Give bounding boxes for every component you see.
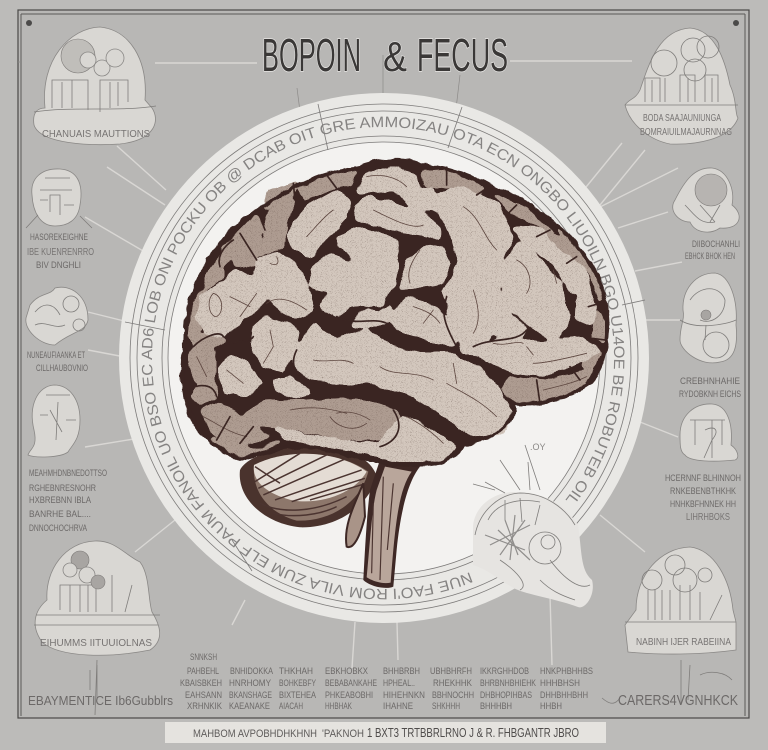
- panel: left item 4: HXBREBNN IBLA: [29, 495, 91, 505]
- panel: left item 4: BANRHE BAL....: [29, 509, 91, 519]
- column 8: DHHBHHBHH: [540, 690, 588, 700]
- column 3: [279, 666, 316, 711]
- column 4: BEBABANKAHE: [325, 678, 377, 688]
- column 3: BIXTEHEA: [279, 690, 316, 700]
- column 1: KBAISBKEH: [180, 678, 222, 688]
- column 5: [383, 666, 425, 711]
- panel: left item 2: HASOREKEIGHNE: [30, 232, 88, 242]
- panel: right item 7: [673, 168, 740, 261]
- icon: top-left food dome: CHANUAIS MAUTTIONS: [42, 129, 150, 140]
- column 7: DHBHOPIHBAS: [480, 690, 532, 700]
- column 4: HHBHAK: [325, 701, 352, 711]
- title: FECUS: [417, 29, 508, 81]
- cerebellum: [240, 446, 377, 527]
- column 2: BNHIDOKKA: [230, 666, 273, 676]
- panel: right item 8: RYDOBKNH EICHS: [679, 389, 741, 399]
- column 5: BHHBRBH: [383, 666, 420, 676]
- panel: right item 8: CREBHNHAHIE: [680, 376, 740, 386]
- signature bottom left: [28, 660, 173, 715]
- panel: left item 4: DNNOCHOCHRVA: [29, 523, 87, 533]
- title: &: [383, 33, 407, 80]
- column 7: IKKRGHHDOB: [480, 666, 529, 676]
- panel: left item 2: IBE KUENRENRRO: [27, 247, 94, 258]
- icon: top-right food dome: BOMRAIUILMAJAURNNAG: [640, 127, 732, 138]
- column 8: HHBH: [540, 701, 562, 711]
- column 1: SNNKSH: [190, 652, 217, 662]
- column 3: AIACAH: [279, 701, 303, 711]
- column 2: HNRHOMY: [229, 678, 271, 688]
- icon: top-left food dome: [34, 27, 156, 145]
- bottom caption banner: MAHBOM AVPOBHDHKHNH: [193, 728, 317, 740]
- panel: left item 4: MEAHMHDNBNEDOTTSO: [29, 468, 107, 478]
- column 6: [430, 666, 474, 711]
- column 1: XRHNKIK: [187, 701, 222, 711]
- column 5: IHAHNE: [383, 701, 413, 711]
- column 8: HNKPHBHHBS: [540, 666, 593, 676]
- icon: bottom-right food dome: [625, 547, 736, 654]
- column 6: BBHNOCHH: [432, 690, 474, 700]
- panel: right item 8: [679, 273, 741, 399]
- column 2: KAEANAKE: [229, 701, 270, 711]
- column 6: SHKHHH: [432, 701, 460, 711]
- panel: right item 9: [665, 404, 741, 523]
- column 6: UBHBHRFH: [430, 666, 472, 676]
- brain illustration: [182, 160, 608, 588]
- lighter inner gyri: [197, 169, 597, 462]
- panel: left item 3: [26, 287, 88, 373]
- ring lettering: NUE FAO'I ROM VILA ZUM ELF PAUM FANOIL UO BSO EC AD6 LOB ONI POCKU OB @ DCAB OIT GRE AMMOIZAU OTA ECN ONGBO LIUOILN BGO U14OE BE ROBUTEB OIL: [142, 116, 624, 600]
- icon: bottom-left food dome: EIHUMMS IITUUIOLNAS: [40, 638, 152, 649]
- signature bottom right: [602, 660, 738, 709]
- panel: left item 4: [28, 385, 107, 533]
- panel: right item 9: HNHKBFHNNEK HH: [670, 499, 736, 509]
- panel: left item 3: NUNEAUFIAANKA ET: [27, 350, 85, 360]
- column 6: RHEKHHK: [433, 678, 472, 688]
- panel: right item 9: RNKEBENBTHKHK: [670, 486, 736, 496]
- panel: left item 4: RGHEBNRESNOHR: [29, 483, 96, 493]
- panel: right item 7: DIIBOCHANHLI: [692, 239, 740, 249]
- title: BOPOIN: [262, 29, 361, 81]
- column 2: BKANSHAGE: [229, 690, 272, 700]
- column 5: HIHEHNKN: [383, 690, 425, 700]
- bottom caption banner: 1 BXT3 TRTBBRLRNO J & R. FHBGANTR JBRO: [367, 725, 579, 740]
- cerebrum outline: [182, 160, 608, 465]
- gyri: [187, 167, 605, 462]
- column 1: EAHSANN: [185, 690, 222, 700]
- column 5: HPHEAL..: [383, 678, 415, 688]
- column 4: EBKHOBKX: [325, 666, 368, 676]
- connector lines: [18, 55, 682, 668]
- brainstem: [346, 460, 420, 588]
- column 3: THKHAH: [279, 666, 313, 676]
- column 1: PAHBEHL: [187, 666, 219, 676]
- outer darker gyri: [189, 172, 605, 455]
- icon: bottom-right food dome: NABINH IJER RABEIINA: [636, 637, 731, 648]
- column 4: [325, 666, 377, 711]
- panel: left item 3: CILLHAUBOVNIO: [36, 363, 88, 373]
- column 4: PHKEABOBHI: [325, 690, 373, 700]
- panel: left item 2: BIV DNGHLI: [36, 260, 81, 270]
- panel: right item 9: HCERNNF BLHINNOH: [665, 473, 741, 483]
- column 8: HHHBHSH: [540, 678, 580, 688]
- column 7: BHHHBH: [480, 701, 512, 711]
- icon: top-right food dome: [625, 28, 738, 144]
- bottom caption banner: [165, 722, 606, 743]
- column 1: [180, 652, 222, 711]
- icon: top-right food dome: BODA SAAJAUNIUNGA: [643, 113, 721, 124]
- column 8: [540, 666, 593, 711]
- column 7: [480, 666, 536, 711]
- panel: right item 7: EBHCK BHOK HEN: [685, 251, 735, 261]
- panel: left item 2: [26, 169, 94, 270]
- central flower icon: [473, 442, 593, 607]
- fissures and detail strokes: [187, 167, 605, 447]
- column 2: [229, 666, 273, 711]
- column 7: BHRBNHBHIEHK: [480, 678, 536, 688]
- column 3: BOHKEBFY: [279, 678, 316, 688]
- bottom caption banner: 'PAKNOH: [322, 728, 364, 740]
- signature bottom right: CARERS4VGNHKCK: [618, 692, 738, 709]
- signature bottom left: EBAYMENTICE Ib6Gubblrs: [28, 693, 173, 708]
- bottom text columns: [180, 652, 593, 711]
- panel: right item 9: LIHRHBOKS: [686, 512, 730, 523]
- icon: bottom-left food dome: [34, 541, 160, 655]
- cerebrum silhouette: [182, 160, 608, 465]
- central flower icon: .OY: [530, 442, 546, 452]
